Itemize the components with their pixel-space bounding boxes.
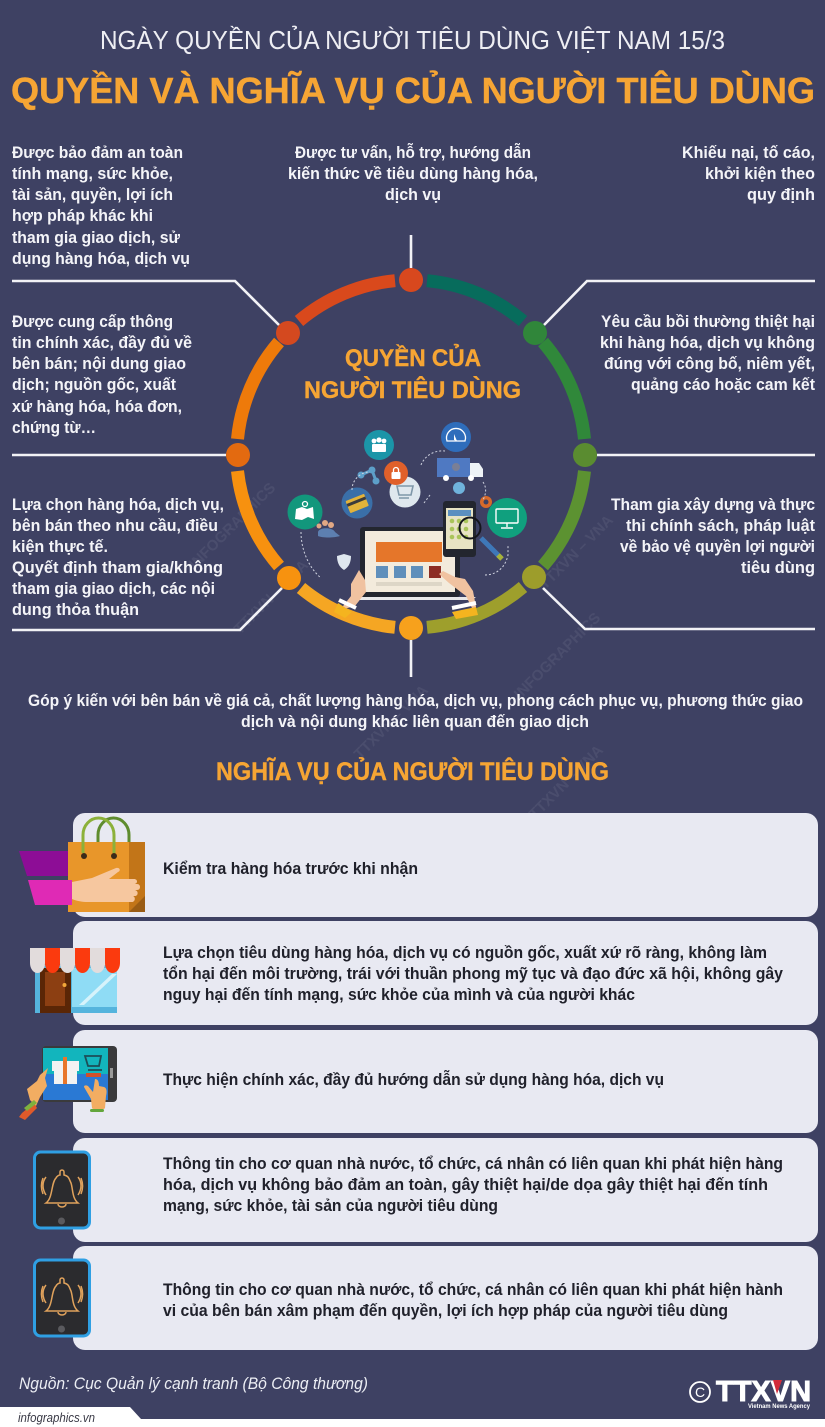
text block: right to give feedback: dịch và nội dung khác liên quan đến giao dịch <box>241 713 589 731</box>
text block: right to participate: Tham gia xây dựng và thực <box>611 496 815 514</box>
text block: right to compensation <box>600 313 815 394</box>
text block: right to compensation: khi hàng hóa, dịch vụ không <box>600 334 815 352</box>
text block: right to safety: tham gia giao dịch, sử <box>12 229 180 247</box>
panel: obligation 5 <box>34 1246 818 1350</box>
text block: right to participate: thi chính sách, pháp luật <box>626 517 815 535</box>
logo: TTXVN: Vietnam News Agency <box>748 1404 811 1410</box>
panel: obligation 3: Thực hiện chính xác, đầy đủ hướng dẫn sử dụng hàng hóa, dịch vụ <box>163 1070 664 1089</box>
icon: shopping bag with hand <box>19 818 145 912</box>
source note: Nguồn: Cục Quản lý cạnh tranh (Bộ Công thương) <box>19 1374 368 1393</box>
text: TTXVN – VNA <box>536 512 617 593</box>
text block: right to choose: Quyết định tham gia/không <box>12 559 223 577</box>
icon: map <box>288 494 322 530</box>
icon: monitor <box>487 498 527 538</box>
icon: gauge <box>441 422 471 452</box>
text block: right to advice <box>288 143 538 204</box>
text block: right to information: tin chính xác, đầy đủ về <box>12 334 192 352</box>
text block: right to safety: dụng hàng hóa, dịch vụ <box>12 250 190 268</box>
ring heading: NGƯỜI TIÊU DÙNG <box>304 376 521 404</box>
icon: group of people <box>316 520 340 538</box>
text block: right to choose: dung thỏa thuận <box>12 601 139 619</box>
panel: obligation 4 <box>34 1138 818 1242</box>
text block: right to safety: hợp pháp khác khi <box>12 207 153 225</box>
ring diagram <box>226 268 597 640</box>
icon: credit card <box>342 488 372 518</box>
connector lines <box>12 235 815 677</box>
dashed paths <box>301 451 508 578</box>
text block: right to complain: quy định <box>747 186 815 204</box>
panel: obligation 4: mạng, sức khỏe, tài sản của người tiêu dùng <box>163 1197 498 1215</box>
text block: right to advice: kiến thức về tiêu dùng hàng hóa, <box>288 165 538 183</box>
text block: right to information: dịch; nguồn gốc, xuất <box>12 376 176 394</box>
text: INFOGRAPHICS <box>186 479 279 573</box>
text block: right to give feedback: Góp ý kiến với bên bán về giá cả, chất lượng hàng hóa, dịch vụ, phong cách phục vụ, phương thức giao <box>28 692 803 710</box>
panel: obligation 2: nguy hại đến tính mạng, sức khỏe của mình và của người khác <box>163 986 635 1004</box>
text: TTXVN – VNA <box>231 557 312 638</box>
logo: TTXVN: TTXVN <box>716 1376 811 1408</box>
icon: tablet shopping <box>19 1046 117 1120</box>
text block: right to safety: tài sản, quyền, lợi ích <box>12 186 173 204</box>
text block: right to advice: Được tư vấn, hỗ trợ, hướng dẫn <box>295 143 531 162</box>
ring heading <box>304 343 521 404</box>
text block: right to information: bên bán; nội dung giao <box>12 355 186 373</box>
icon: shield <box>337 554 351 570</box>
panel: obligation 4: hóa, dịch vụ không bảo đảm an toàn, gây thiệt hại/de dọa gây thiệt hại đến tính <box>163 1176 768 1194</box>
text block: right to information: xứ hàng hóa, hóa đơn, <box>12 398 182 416</box>
text block: right to information: Được cung cấp thông <box>12 313 173 331</box>
icon: small dot <box>453 482 465 494</box>
panel: obligation 2: Lựa chọn tiêu dùng hàng hóa, dịch vụ có nguồn gốc, xuất xứ rõ ràng, không làm <box>163 944 767 962</box>
text block: right to participate: tiêu dùng <box>741 559 815 577</box>
icon: phone bell <box>34 1260 90 1336</box>
panel: obligation 2: tổn hại đến môi trường, trái với thuần phong mỹ tục và đạo đức xã hội, không gây <box>163 965 784 983</box>
text block: right to complain <box>682 144 815 204</box>
title <box>11 24 815 111</box>
text block: right to information: chứng từ… <box>12 419 96 437</box>
panel: obligation 4: Thông tin cho cơ quan nhà nước, tổ chức, cá nhân có liên quan khi phát hiện hàng <box>163 1155 783 1173</box>
icon: gear <box>480 496 492 508</box>
text block: right to choose: kiện thực tế. <box>12 538 108 556</box>
icon: people <box>364 430 394 460</box>
footer tab: infographics.vn <box>18 1411 95 1425</box>
panel: obligation 1 <box>19 813 818 917</box>
logo: TTXVN: C <box>695 1384 705 1400</box>
icon: phone bell <box>34 1152 90 1228</box>
text block: right to compensation: quảng cáo hoặc cam kết <box>631 376 815 394</box>
title: QUYỀN VÀ NGHĨA VỤ CỦA NGƯỜI TIÊU DÙNG <box>11 69 815 111</box>
text block: right to safety <box>12 144 190 268</box>
text block: right to choose: Lựa chọn hàng hóa, dịch vụ, <box>12 496 224 514</box>
text: TTXVN – VNA <box>351 682 432 763</box>
phone with magnifier <box>443 501 502 559</box>
panel: obligation 3 <box>19 1030 818 1133</box>
hands <box>334 570 478 619</box>
text block: right to compensation: Yêu cầu bồi thường thiệt hại <box>601 313 815 331</box>
icon: share nodes <box>358 466 380 484</box>
icon: storefront <box>30 948 120 1013</box>
text: INFOGRAPHICS <box>511 609 604 703</box>
text block: right to complain: Khiếu nại, tố cáo, <box>682 144 815 162</box>
text block: right to safety: tính mạng, sức khỏe, <box>12 165 173 183</box>
text block: right to advice: dịch vụ <box>385 186 441 204</box>
text block: right to participate <box>611 496 815 577</box>
text block: right to safety: Được bảo đảm an toàn <box>12 144 183 162</box>
text block: right to participate: về bảo vệ quyền lợi người <box>620 538 815 556</box>
panel: obligation 1: Kiểm tra hàng hóa trước khi nhận <box>163 860 418 878</box>
heading: obligations: NGHĨA VỤ CỦA NGƯỜI TIÊU DÙNG <box>216 756 609 786</box>
text block: right to choose: tham gia giao dịch, các nội <box>12 580 215 598</box>
text: TTXVN – VNA <box>526 742 607 823</box>
panel: obligation 5: Thông tin cho cơ quan nhà nước, tổ chức, cá nhân có liên quan khi phát hiện hành <box>163 1281 783 1299</box>
panel: obligation 5: vi của bên bán xâm phạm đến quyền, lợi ích hợp pháp của người tiêu dùng <box>163 1302 728 1320</box>
icon: lock <box>384 461 420 508</box>
text block: right to choose: bên bán theo nhu cầu, điều <box>12 517 218 535</box>
icon: delivery truck <box>437 458 483 481</box>
panel: obligation 2 <box>30 921 818 1025</box>
title: NGÀY QUYỀN CỦA NGƯỜI TIÊU DÙNG VIỆT NAM 15/3 <box>100 24 725 55</box>
text block: right to give feedback <box>28 692 803 731</box>
text block: right to compensation: đúng với công bố, niêm yết, <box>604 355 815 373</box>
illustration: online shopping <box>288 422 527 619</box>
text block: right to choose <box>12 496 224 619</box>
laptop <box>350 527 476 600</box>
footer tab <box>0 1407 141 1427</box>
text block: right to complain: khởi kiện theo <box>705 165 815 183</box>
text block: right to information <box>12 313 192 437</box>
ring heading: QUYỀN CỦA <box>345 343 481 372</box>
